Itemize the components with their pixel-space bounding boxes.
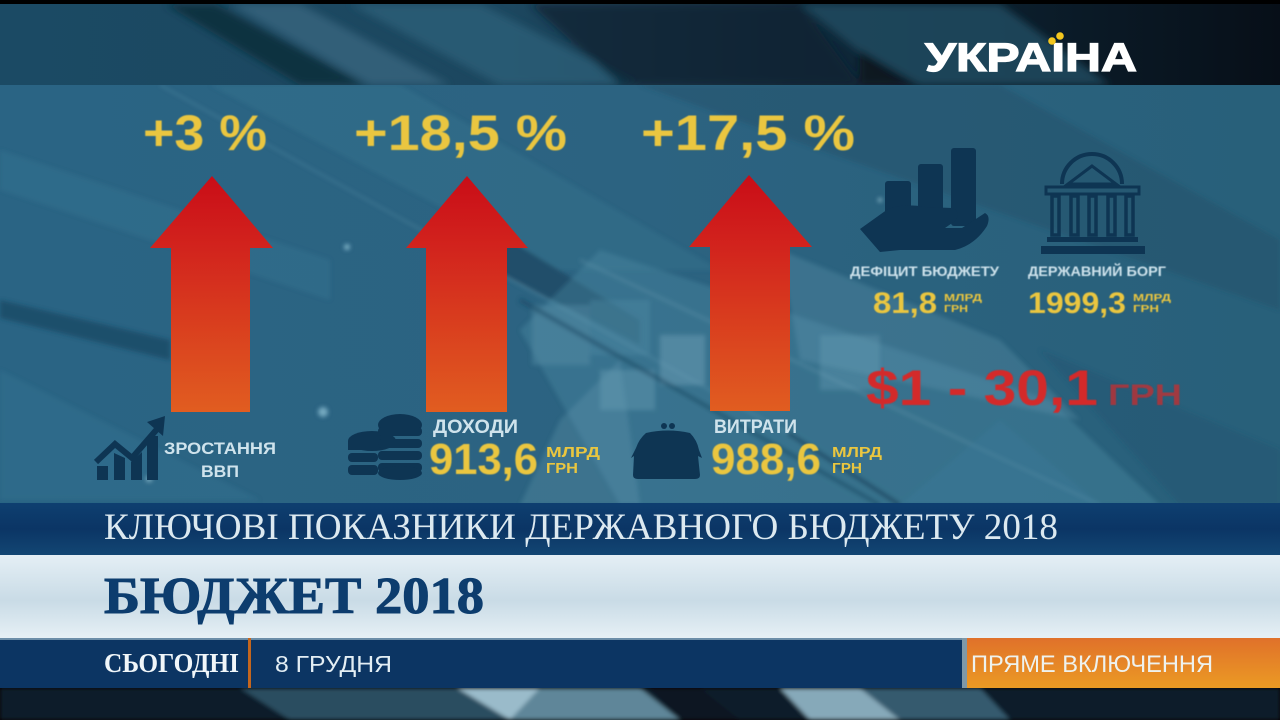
label: Зростання ВВП: ЗРОСТАННЯ	[164, 439, 276, 458]
label: Витрати: ВИТРАТИ	[714, 417, 797, 438]
value: 1999,3 млрд грн: 1999,3	[1028, 287, 1126, 320]
value: 81,8 млрд грн: МЛРД	[944, 293, 982, 304]
value: 988,6 млрд грн: МЛРД	[832, 444, 882, 461]
value: +3 %: +3 %	[143, 105, 267, 161]
icon: purse	[631, 423, 702, 479]
lower third: subtitle bar	[0, 503, 1280, 555]
icon: coins	[348, 414, 422, 480]
icon: growth chart	[96, 416, 165, 480]
value: 913,6 млрд грн: МЛРД	[546, 444, 600, 461]
value: 988,6 млрд грн: 988,6	[711, 435, 821, 484]
value: 81,8 млрд грн: 81,8	[873, 287, 937, 320]
value: 1999,3 млрд грн	[1028, 287, 1171, 320]
label: Зростання ВВП: ВВП	[201, 462, 239, 481]
value: 988,6 млрд грн	[711, 435, 882, 484]
lower third: info bar	[0, 638, 1280, 688]
value: 913,6 млрд грн: ГРН	[546, 460, 578, 477]
label: Державний борг: ДЕРЖАВНИЙ БОРГ	[1028, 262, 1166, 279]
value: 1999,3 млрд грн: ГРН	[1133, 304, 1159, 315]
arrow: Доходи	[406, 176, 528, 412]
lower third: subtitle bar: КЛЮЧОВІ ПОКАЗНИКИ ДЕРЖАВНОГО БЮДЖЕТУ 2018	[104, 507, 1058, 548]
panel: ВВП growth	[96, 105, 276, 481]
panel: Дефіцит бюджету	[850, 148, 999, 320]
value: +18,5 %: +18,5 %	[354, 105, 567, 161]
label: Доходи: ДОХОДИ	[433, 417, 518, 438]
lower third: headline bar: БЮДЖЕТ 2018	[104, 568, 484, 625]
exchange rate: ГРН	[1108, 379, 1182, 412]
icon: hand with coins	[860, 148, 989, 252]
panel: Доходи	[348, 105, 600, 484]
panel: Витрати	[631, 105, 882, 484]
value: 988,6 млрд грн: ГРН	[832, 460, 862, 477]
value: +17,5 %: +17,5 %	[641, 105, 855, 161]
value: 1999,3 млрд грн: МЛРД	[1133, 293, 1171, 304]
value: 913,6 млрд грн	[429, 435, 600, 484]
arrow: ВВП	[150, 176, 273, 412]
live tag: ПРЯМЕ ВКЛЮЧЕННЯ	[971, 651, 1213, 678]
value: 81,8 млрд грн: ГРН	[944, 304, 968, 315]
panel: Державний борг	[1028, 154, 1171, 320]
label: Дефіцит бюджету: ДЕФІЦИТ БЮДЖЕТУ	[850, 263, 999, 279]
live tag	[962, 638, 1280, 688]
exchange rate	[866, 360, 1182, 416]
icon: government building	[1041, 154, 1145, 254]
programme name: СЬОГОДНІ	[104, 648, 239, 678]
label: Зростання ВВП	[164, 439, 276, 481]
date: 8 ГРУДНЯ	[275, 651, 392, 677]
exchange rate: $1 - 30,1	[866, 360, 1098, 416]
logo: Україна: УКРАІНА	[925, 36, 1137, 80]
value: 913,6 млрд грн: 913,6	[429, 435, 538, 484]
lower third: headline bar	[0, 555, 1280, 638]
arrow: Витрати	[689, 175, 812, 411]
value: 81,8 млрд грн	[873, 287, 982, 320]
